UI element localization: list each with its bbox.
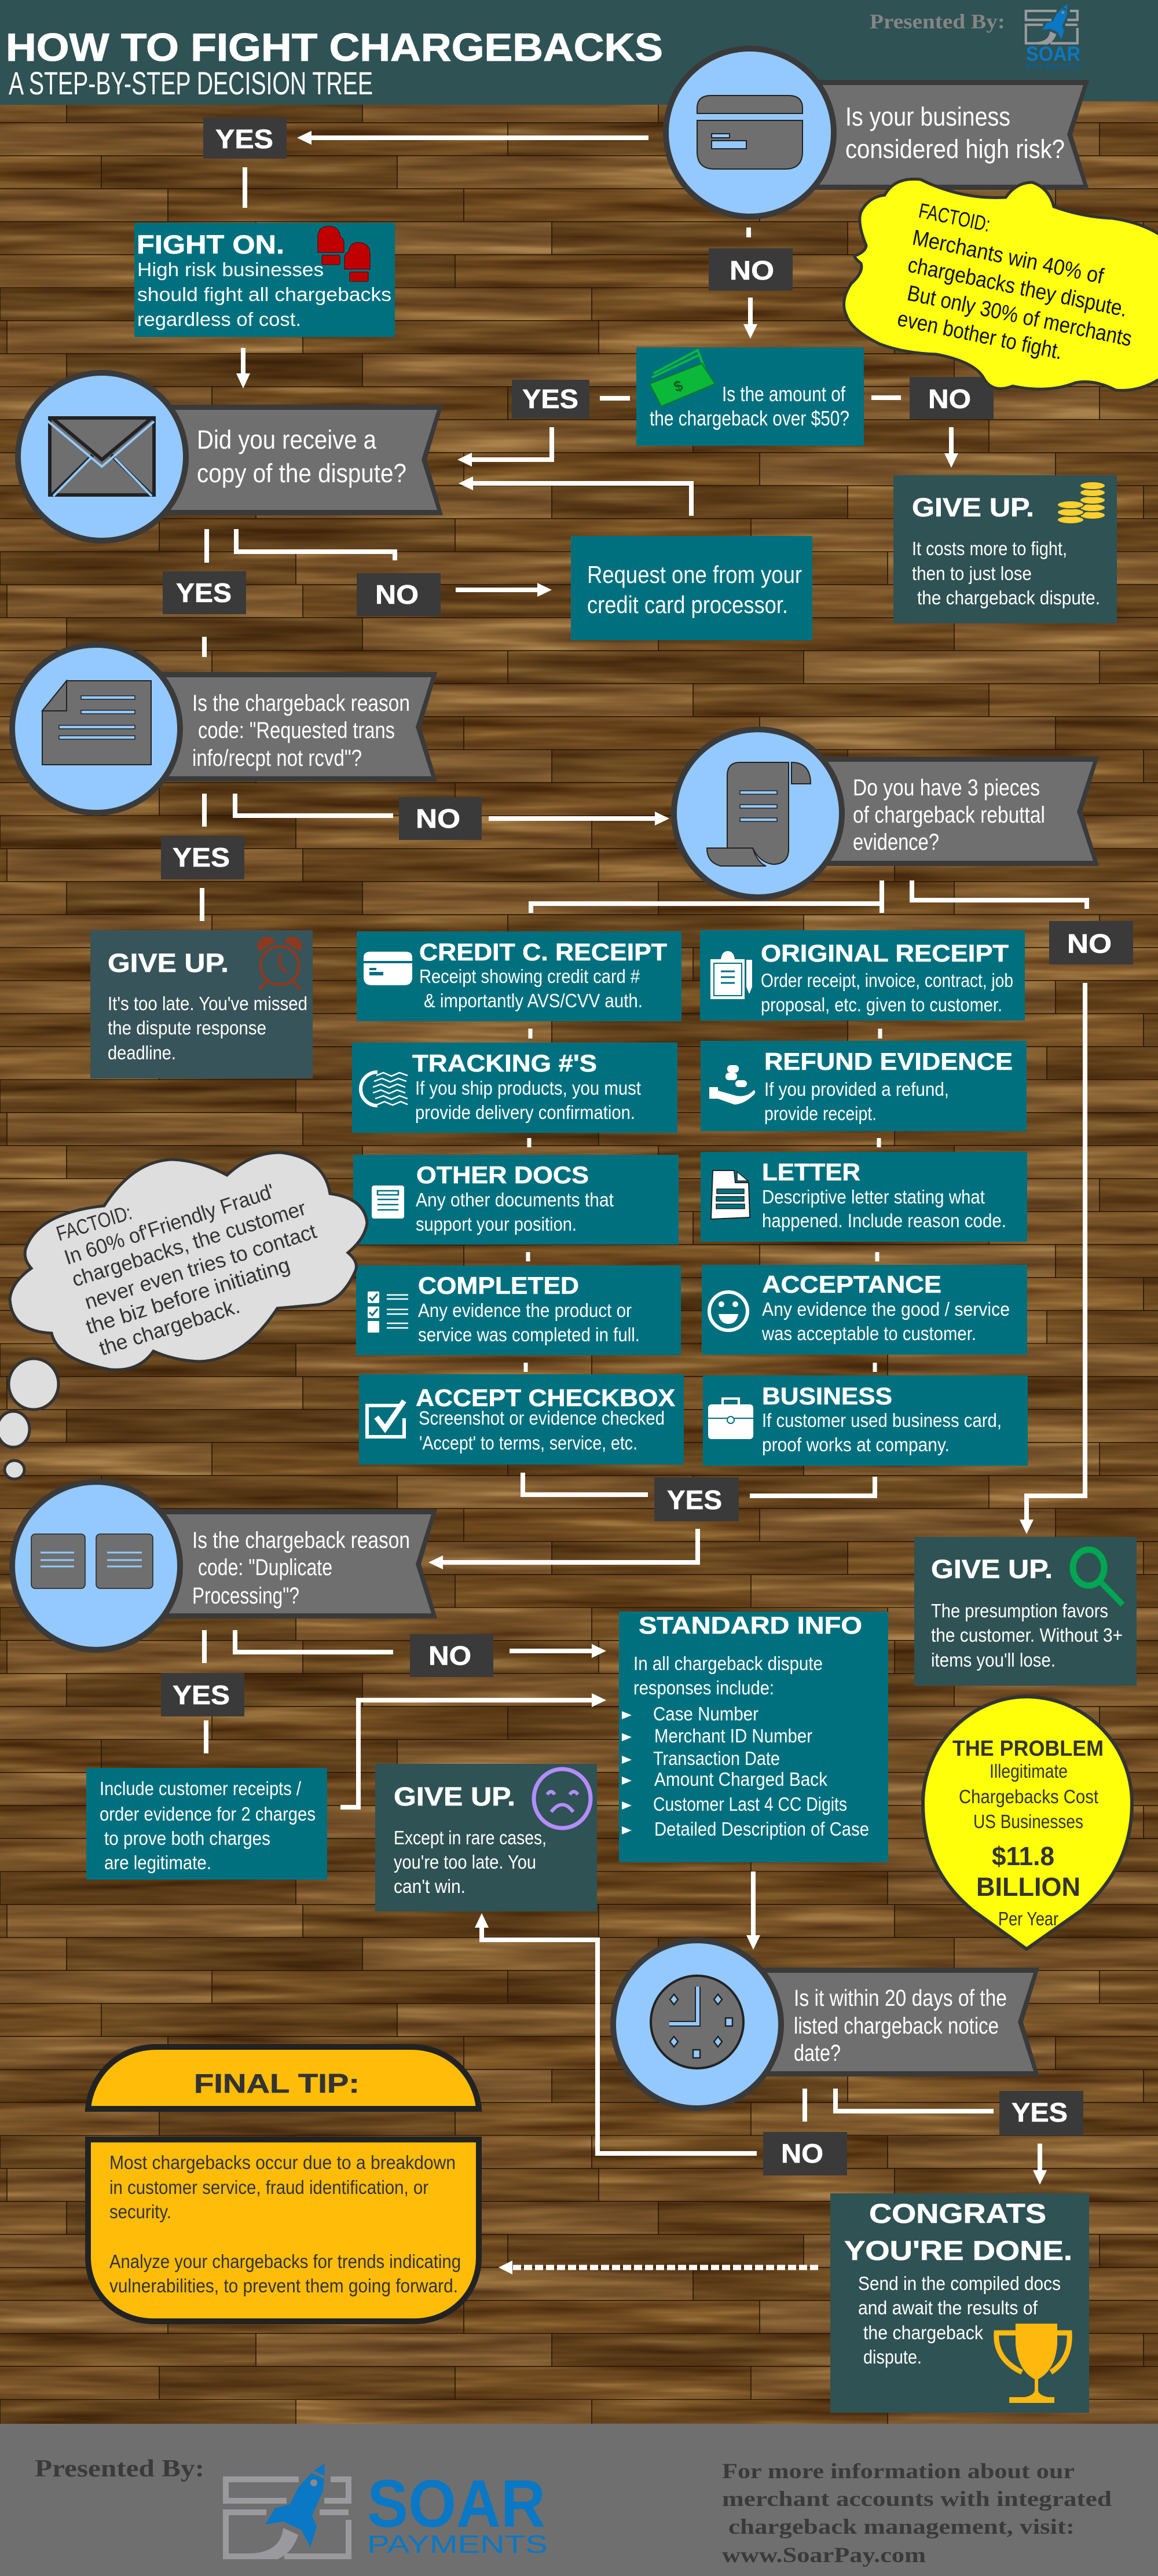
- label: no: NO: [730, 255, 774, 285]
- header logo: [1026, 5, 1080, 72]
- panel: tracking numbers: provide delivery confirmation.: [415, 1102, 635, 1123]
- header band: [0, 0, 1158, 105]
- panel: refund evidence: REFUND EVIDENCE: [764, 1048, 1013, 1075]
- footer call to action: [722, 2460, 1112, 2567]
- panel: acceptance: [702, 1265, 1027, 1355]
- label: yes: [161, 1673, 244, 1716]
- panel: standard info: responses include:: [633, 1677, 774, 1698]
- connector: [243, 167, 247, 208]
- panel: other docs: OTHER DOCS: [416, 1161, 589, 1188]
- panel: business: BUSINESS: [762, 1382, 892, 1410]
- callout: the problem pin: Per Year: [998, 1908, 1058, 1929]
- label: yes: YES: [176, 578, 232, 608]
- panel: completed: Any evidence the product or: [418, 1300, 632, 1321]
- node: requested trans info question: [12, 645, 437, 813]
- icon: credit card: [697, 96, 802, 169]
- connector: circle to no: [746, 227, 751, 237]
- connector: evidence yes branch: [531, 880, 882, 913]
- panel: give up, rare cases: can't win.: [394, 1876, 466, 1897]
- panel: standard info: STANDARD INFO: [639, 1612, 862, 1639]
- panel: letter: LETTER: [762, 1158, 860, 1186]
- panel: amount question: the chargeback over $50?: [650, 406, 849, 430]
- panel: give up, too late: GIVE UP.: [108, 948, 229, 978]
- node: within 20 days question: listed chargeback notice: [794, 2013, 999, 2039]
- panel: letter: Descriptive letter stating what: [762, 1186, 985, 1208]
- label: yes: YES: [522, 384, 578, 414]
- label: no: NO: [428, 1641, 471, 1671]
- header logo: PAYMENTS: [1026, 62, 1080, 72]
- panel: give up, presumption: items you'll lose.: [931, 1649, 1056, 1671]
- footer call to action: chargeback management, visit:: [728, 2515, 1075, 2539]
- panel: completed: service was completed in full.: [418, 1324, 640, 1345]
- panel: congrats: and await the results of: [858, 2297, 1038, 2318]
- panel: original receipt: [700, 930, 1025, 1021]
- callout: yellow factoid: Merchants win 40% of: [910, 226, 1106, 289]
- callout: gray factoid thought cloud: never even tries to contact: [82, 1219, 319, 1314]
- panel: standard info: Customer Last 4 CC Digits: [653, 1793, 847, 1815]
- icon: trophy: [996, 2324, 1069, 2403]
- icon: checklist: [368, 1291, 408, 1333]
- node: within 20 days question: [613, 1940, 1039, 2108]
- panel: congrats: YOU'RE DONE.: [844, 2235, 1072, 2266]
- callout: yellow factoid: even bother to fight.: [895, 307, 1065, 365]
- panel: final tip body: security.: [109, 2201, 171, 2222]
- callout: gray factoid thought cloud: In 60% of'Friendly Fraud': [61, 1179, 277, 1269]
- label: no: [410, 1634, 493, 1677]
- label: yes: [999, 2091, 1083, 2135]
- label: yes: [161, 836, 244, 879]
- label: yes: YES: [173, 842, 230, 872]
- connector: [529, 1138, 879, 1147]
- footer logo: SOAR: [367, 2466, 545, 2541]
- footer call to action: merchant accounts with integrated: [722, 2487, 1112, 2511]
- arrow: fight on to dispute copy: [236, 348, 250, 388]
- panel: give up, too late: deadline.: [108, 1042, 176, 1063]
- panel: refund evidence: If you provided a refund,: [764, 1078, 949, 1100]
- icon: cash: $: [671, 376, 686, 396]
- node: high risk question: considered high risk?: [845, 134, 1065, 164]
- arrow: yes to duplicate processing: [428, 1529, 698, 1569]
- panel: give up, rare cases: Except in rare cases,: [394, 1827, 547, 1848]
- panel: acceptance: Any evidence the good / service: [762, 1298, 1010, 1320]
- node: within 20 days question: Is it within 20 days of the: [794, 1986, 1007, 2011]
- panel: refund evidence: [701, 1041, 1027, 1131]
- panel: acceptance: ACCEPTANCE: [762, 1271, 941, 1298]
- node: requested trans info question: Is the chargeback reason: [192, 691, 410, 716]
- panel: accept checkbox: 'Accept' to terms, service, etc.: [419, 1432, 637, 1454]
- arrow: congrats to final tip, dashed: [499, 2261, 818, 2274]
- panel: congrats: CONGRATS: [869, 2198, 1046, 2229]
- panel: give up, costs more: GIVE UP.: [912, 493, 1034, 522]
- label: no: NO: [375, 579, 419, 610]
- label: yes: YES: [173, 1680, 230, 1710]
- panel: give up, presumption: the customer. Without 3+: [931, 1624, 1123, 1646]
- arrow: no to standard info: [510, 1644, 606, 1658]
- node: copy of dispute question: Did you receive a: [197, 425, 377, 454]
- panel: standard info: Merchant ID Number: [654, 1725, 812, 1746]
- connector: duplicate to yes: [202, 1630, 207, 1663]
- callout: gray factoid thought cloud: [0, 1153, 367, 1479]
- node: requested trans info question: info/recpt not rcvd"?: [192, 746, 362, 771]
- node: copy of dispute question: [18, 373, 443, 541]
- icon: checkbox: [367, 1401, 404, 1437]
- panel: request copy: [571, 536, 812, 640]
- panel: other docs: Any other documents that: [416, 1189, 614, 1210]
- panel: other docs: support your position.: [416, 1213, 577, 1235]
- callout: the problem pin: $11.8: [992, 1841, 1054, 1871]
- panel: give up, rare cases: [375, 1764, 597, 1911]
- panel: final tip body: Most chargebacks occur due to a breakdown: [109, 2152, 456, 2173]
- panel: final tip body: in customer service, fraud identification, or: [109, 2177, 428, 2198]
- label: no: NO: [928, 384, 971, 414]
- panel: final tip heading: FINAL TIP:: [194, 2068, 360, 2098]
- panel: standard info: Amount Charged Back: [654, 1768, 827, 1790]
- panel: standard info: [619, 1612, 888, 1862]
- panel: refund evidence: provide receipt.: [764, 1103, 877, 1124]
- panel: acceptance: was acceptable to customer.: [761, 1323, 976, 1344]
- label: yes: YES: [215, 124, 273, 154]
- panel: tracking numbers: [352, 1043, 677, 1133]
- icon: alarm clock: [259, 938, 301, 989]
- icon: two receipts: [31, 1534, 153, 1588]
- footer logo: [226, 2464, 548, 2559]
- connector: amount to no: [871, 395, 901, 400]
- footer call to action: www.SoarPay.com: [722, 2544, 926, 2567]
- arrow: high risk to yes: [297, 131, 648, 145]
- arrow: yes to congrats: [1033, 2144, 1047, 2185]
- connector: reason code to no: [235, 794, 393, 816]
- panel: include receipts: to prove both charges: [104, 1828, 270, 1849]
- panel: credit card receipt: Receipt showing credit card #: [419, 966, 640, 987]
- panel: original receipt: ORIGINAL RECEIPT: [761, 940, 1009, 967]
- panel: original receipt: Order receipt, invoice, contract, job: [761, 970, 1013, 991]
- label: no: NO: [781, 2138, 823, 2168]
- panel: final tip body: [88, 2140, 479, 2321]
- arrow: standard info to 20 days: [746, 1872, 760, 1950]
- panel: credit card receipt: CREDIT C. RECEIPT: [419, 938, 667, 966]
- panel: request copy: Request one from your: [587, 561, 802, 588]
- panel: amount question: [636, 347, 864, 446]
- label: no: [357, 573, 441, 616]
- panel: give up, too late: It's too late. You've missed: [108, 993, 307, 1014]
- panel: fight on: High risk businesses: [137, 259, 324, 280]
- panel: give up, presumption: GIVE UP.: [931, 1554, 1053, 1584]
- panel: standard info: In all chargeback dispute: [633, 1653, 823, 1674]
- icon: card: [364, 952, 412, 985]
- panel: business: proof works at company.: [762, 1434, 950, 1455]
- connector: dispute copy to no: [236, 529, 395, 560]
- panel: accept checkbox: [359, 1374, 684, 1465]
- panel: congrats: dispute.: [863, 2346, 922, 2368]
- callout: gray factoid thought cloud: FACTOID:: [53, 1200, 134, 1246]
- callout: the problem pin: [923, 1697, 1132, 1949]
- panel: completed: COMPLETED: [418, 1272, 579, 1299]
- connector: yes to include panel: [204, 1720, 208, 1753]
- connector: 20 days to no: [802, 2089, 807, 2122]
- node: high risk question: [666, 49, 1089, 216]
- panel: standard info: Detailed Description of Case: [654, 1818, 869, 1840]
- label: yes: YES: [1012, 2097, 1068, 2127]
- node: rebuttal evidence question: of chargeback rebuttal: [853, 802, 1045, 828]
- footer call to action: For more information about our: [722, 2460, 1075, 2483]
- label: no: [709, 248, 793, 291]
- label: yes: [163, 571, 246, 614]
- panel: accept checkbox: Screenshot or evidence checked: [419, 1407, 665, 1429]
- panel: give up, rare cases: you're too late. You: [394, 1851, 536, 1873]
- panel: amount question: Is the amount of: [722, 382, 846, 406]
- arrow: no to give up: [475, 1913, 757, 2153]
- node: rebuttal evidence question: [674, 729, 1099, 897]
- header presented by: [870, 5, 1080, 72]
- callout: yellow factoid: FACTOID:: [917, 199, 992, 236]
- connector: right column to yes: [750, 1477, 875, 1496]
- panel: give up, costs more: [893, 475, 1117, 623]
- panel: give up, too late: [90, 930, 313, 1078]
- panel: include receipts: order evidence for 2 charges: [100, 1803, 316, 1825]
- icon: sad face: [534, 1769, 591, 1828]
- arrow: no to request: [456, 583, 552, 597]
- connector: yes to reason code: [202, 637, 207, 657]
- label: no: NO: [416, 803, 460, 834]
- arrow: include panel to standard info: [340, 1693, 606, 1807]
- panel: fight on: [134, 223, 395, 337]
- node: duplicate processing question: [12, 1482, 437, 1650]
- callout: gray factoid thought cloud: chargebacks, the customer: [69, 1196, 309, 1291]
- callout: yellow factoid: [844, 179, 1158, 390]
- label: no: NO: [1067, 929, 1112, 959]
- panel: business: [703, 1375, 1028, 1466]
- connector: dispute copy to yes: [204, 529, 209, 563]
- arrow: no to rebuttal evidence: [489, 812, 669, 825]
- icon: receipt: [372, 1186, 404, 1219]
- label: no: [399, 797, 482, 840]
- panel: congrats: the chargeback: [863, 2322, 983, 2343]
- arrow: no to give up presumption: [1020, 983, 1085, 1534]
- connector: left column to yes: [523, 1473, 648, 1495]
- panel: fight on: FIGHT ON.: [137, 230, 284, 259]
- arrow: no to amount: [743, 298, 757, 339]
- node: high risk question: Is your business: [845, 102, 1010, 131]
- panel: congrats: Send in the compiled docs: [858, 2273, 1061, 2294]
- footer logo: PAYMENTS: [367, 2530, 548, 2559]
- panel: tracking numbers: If you ship products, you must: [415, 1077, 641, 1099]
- panel: give up, presumption: [914, 1537, 1137, 1686]
- panel: original receipt: proposal, etc. given to customer.: [761, 994, 1002, 1015]
- title: HOW TO FIGHT CHARGEBACKS: [6, 25, 663, 69]
- callout: gray factoid thought cloud: the chargeback.: [96, 1294, 243, 1360]
- node: rebuttal evidence question: Do you have 3 pieces: [853, 775, 1040, 801]
- header presented by: Presented By:: [870, 10, 1005, 33]
- panel: final tip heading: [88, 2047, 479, 2109]
- bullets: [622, 1711, 632, 1834]
- panel: request copy: credit card processor.: [587, 591, 788, 618]
- connector: [530, 1029, 880, 1039]
- panel: standard info: Transaction Date: [653, 1748, 780, 1769]
- icon: waves: [361, 1072, 408, 1106]
- panel: other docs: [353, 1155, 679, 1245]
- connector: reason code to yes: [202, 794, 207, 827]
- panel: give up, too late: the dispute response: [108, 1017, 266, 1039]
- label: no: [1049, 921, 1133, 964]
- label: yes: [512, 380, 589, 419]
- label: yes: [203, 118, 287, 159]
- panel: completed: [356, 1265, 681, 1355]
- connector: [526, 1363, 875, 1372]
- label: no: [910, 377, 994, 419]
- callout: the problem pin: BILLION: [976, 1872, 1080, 1902]
- panel: fight on: should fight all chargebacks: [137, 284, 391, 305]
- panel: give up, presumption: The presumption favors: [931, 1600, 1108, 1621]
- panel: give up, costs more: It costs more to fight,: [912, 538, 1067, 559]
- panel: final tip body: Analyze your chargebacks for trends indicating: [109, 2251, 461, 2272]
- node: within 20 days question: date?: [794, 2041, 841, 2066]
- panel: business: If customer used business card,: [762, 1410, 1002, 1431]
- icon: document: [42, 681, 151, 765]
- callout: the problem pin: Chargebacks Cost: [959, 1786, 1098, 1807]
- connector: [528, 1252, 877, 1261]
- footer presented by: Presented By:: [35, 2456, 204, 2482]
- icon: clipboard: [710, 951, 752, 999]
- arrow: yes to dispute copy: [457, 427, 552, 467]
- node: rebuttal evidence question: evidence?: [853, 830, 939, 855]
- icon: boxing gloves: [318, 226, 370, 281]
- panel: include receipts: are legitimate.: [104, 1852, 211, 1873]
- connector: duplicate to no: [235, 1630, 393, 1652]
- label: no: [763, 2132, 847, 2175]
- icon: clock: [651, 1976, 743, 2068]
- node: duplicate processing question: code: "Duplicate: [198, 1555, 332, 1580]
- arrow: no to give up: [944, 427, 958, 468]
- icon: letter page: [711, 1170, 750, 1219]
- node: duplicate processing question: Is the chargeback reason: [192, 1528, 410, 1553]
- panel: fight on: regardless of cost.: [137, 309, 301, 330]
- panel: credit card receipt: & importantly AVS/CVV auth.: [424, 990, 643, 1011]
- arrow: request to dispute copy: [459, 476, 691, 516]
- node: duplicate processing question: Processing"?: [192, 1583, 299, 1609]
- panel: give up, costs more: then to just lose: [912, 563, 1032, 584]
- callout: the problem pin: Illegitimate: [990, 1760, 1068, 1782]
- subtitle: A STEP-BY-STEP DECISION TREE: [9, 65, 373, 101]
- panel: letter: happened. Include reason code.: [762, 1210, 1006, 1231]
- callout: gray factoid thought cloud: the biz before initiating: [83, 1253, 293, 1339]
- panel: final tip body: vulnerabilities, to prevent them going forward.: [109, 2275, 458, 2296]
- callout: yellow factoid: chargebacks they dispute.: [906, 253, 1130, 322]
- panel: give up, rare cases: GIVE UP.: [394, 1782, 515, 1811]
- panel: credit card receipt: [357, 931, 681, 1021]
- panel: congrats: [830, 2193, 1089, 2413]
- header logo: SOAR: [1026, 43, 1080, 65]
- icon: coins: [1057, 482, 1105, 524]
- icon: briefcase: [708, 1399, 753, 1439]
- footer band: [0, 2424, 1158, 2576]
- panel: include receipts: [86, 1768, 327, 1880]
- icon: smiley: [709, 1292, 747, 1330]
- icon: cash: [650, 350, 715, 406]
- panel: give up, costs more: the chargeback dispute.: [917, 587, 1100, 608]
- panel: standard info: Case Number: [653, 1703, 758, 1724]
- panel: letter: [701, 1152, 1027, 1242]
- panel: tracking numbers: TRACKING #'S: [412, 1050, 597, 1077]
- panel: accept checkbox: ACCEPT CHECKBOX: [416, 1384, 675, 1411]
- icon: magnifier: [1073, 1550, 1123, 1605]
- callout: the problem pin: US Businesses: [973, 1811, 1083, 1832]
- callout: the problem pin: THE PROBLEM: [952, 1737, 1104, 1761]
- icon: hand with coins: [709, 1065, 755, 1104]
- icon: scroll: [707, 762, 811, 866]
- connector: evidence no branch: [912, 880, 1087, 909]
- node: requested trans info question: code: "Requested trans: [198, 718, 395, 743]
- node: copy of dispute question: copy of the dispute?: [197, 458, 406, 488]
- connector: amount to yes: [600, 396, 630, 401]
- panel: include receipts: Include customer receipts /: [100, 1778, 302, 1799]
- connector: 20 days to yes: [835, 2089, 994, 2111]
- connector: yes to give up: [200, 888, 204, 921]
- label: yes: YES: [667, 1485, 722, 1515]
- icon: envelope: [44, 418, 154, 496]
- label: yes: [654, 1477, 739, 1521]
